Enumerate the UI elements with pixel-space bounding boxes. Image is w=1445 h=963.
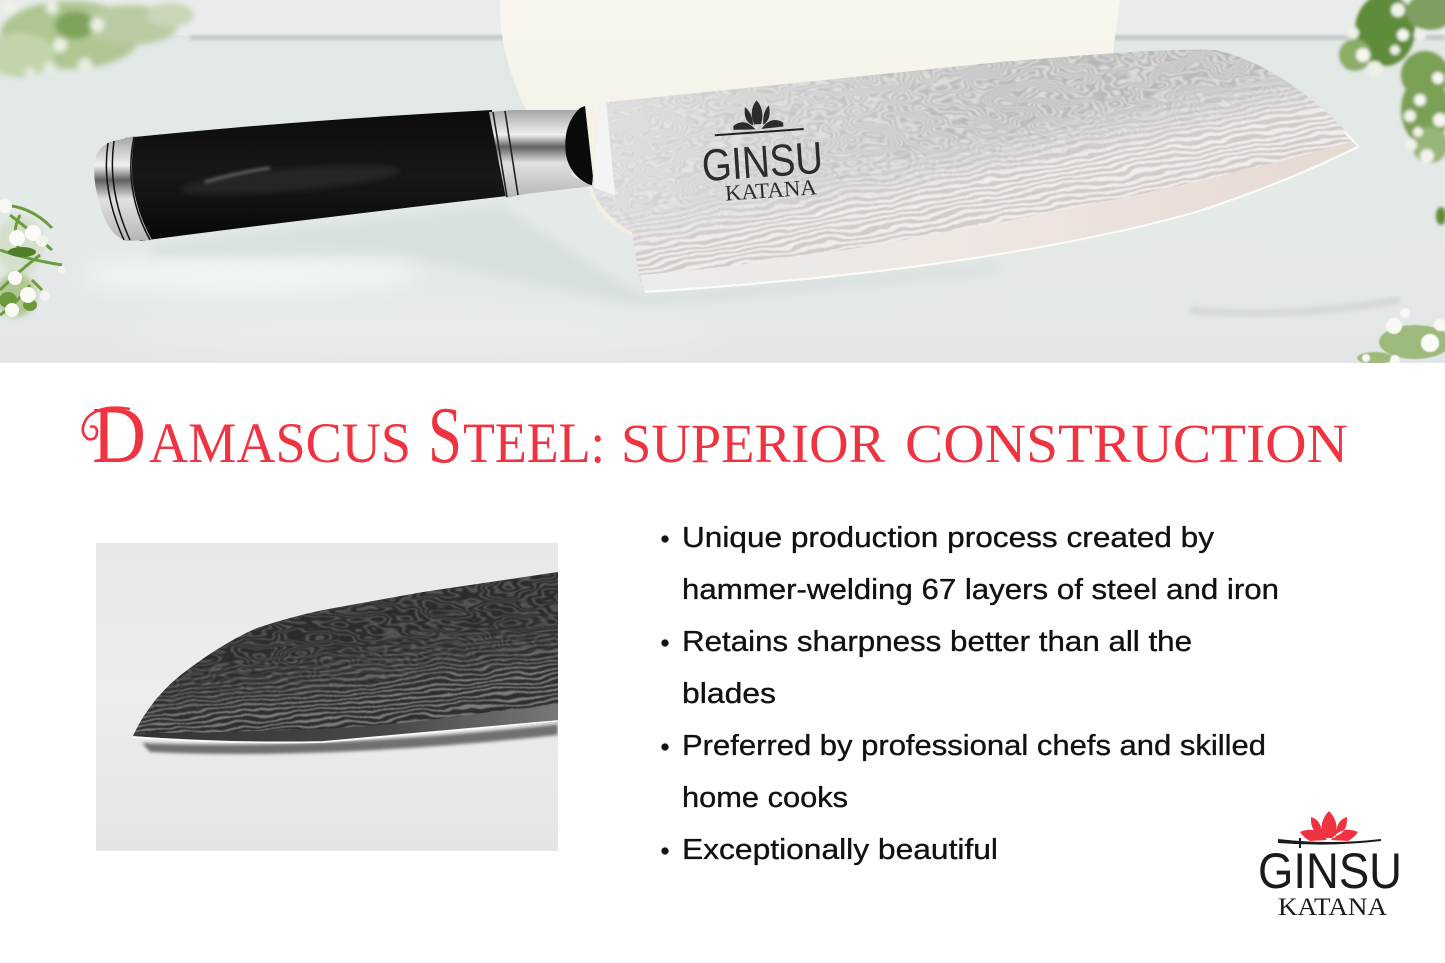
lotus mark (732, 99, 783, 131)
bullet 2: Retains sharpness better than all the (682, 626, 1192, 658)
icon: red lotus (1300, 811, 1358, 841)
flowers: bottom right (1357, 308, 1445, 365)
title: AMASCUS (149, 412, 411, 475)
counter and wall background (0, 0, 1445, 363)
butt cap (94, 136, 152, 241)
photo: close-up of Damascus blade tip (96, 543, 560, 851)
title: D (92, 392, 146, 480)
icon: katana sword (1278, 838, 1381, 848)
bullet list (662, 522, 1279, 866)
title (83, 392, 1348, 480)
blade logo: GINSU (700, 132, 824, 191)
blade edge highlight (133, 721, 558, 742)
bullet 3: home cooks (682, 782, 848, 814)
blade logo (704, 100, 820, 201)
ferrule rings and bolster (489, 110, 592, 198)
knife shadow (150, 205, 1000, 306)
logo: Ginsu Katana (1258, 811, 1402, 921)
Damascus blade (592, 50, 1360, 293)
logo: Ginsu Katana: KATANA (1278, 894, 1387, 921)
bullet 1: Unique production process created by (682, 522, 1215, 554)
flowers: top left (0, 1, 194, 77)
white ceramic block behind knife (500, 0, 1120, 240)
bullet 2: blades (682, 678, 776, 710)
title: SUPERIOR (621, 413, 885, 474)
bullet 3: Preferred by professional chefs and skilled (682, 730, 1266, 762)
bullet 1: hammer-welding 67 layers of steel and iron (682, 574, 1279, 606)
bullet 1 (662, 522, 1279, 606)
blade logo: KATANA (724, 174, 818, 206)
bullet 4: Exceptionally beautiful (682, 834, 998, 866)
blade shadow (142, 724, 558, 754)
bullet 2 (662, 626, 1192, 710)
knife handle (94, 106, 594, 241)
flowers: top right (1339, 0, 1445, 225)
flowers: left (0, 199, 66, 317)
title: TEEL: (463, 412, 605, 475)
hero photo: knife on marble counter (0, 0, 1445, 365)
title: CONSTRUCTION (905, 413, 1348, 474)
bullet 3 (662, 730, 1266, 814)
title: S (428, 392, 462, 480)
logo: Ginsu Katana: GINSU (1258, 843, 1402, 899)
